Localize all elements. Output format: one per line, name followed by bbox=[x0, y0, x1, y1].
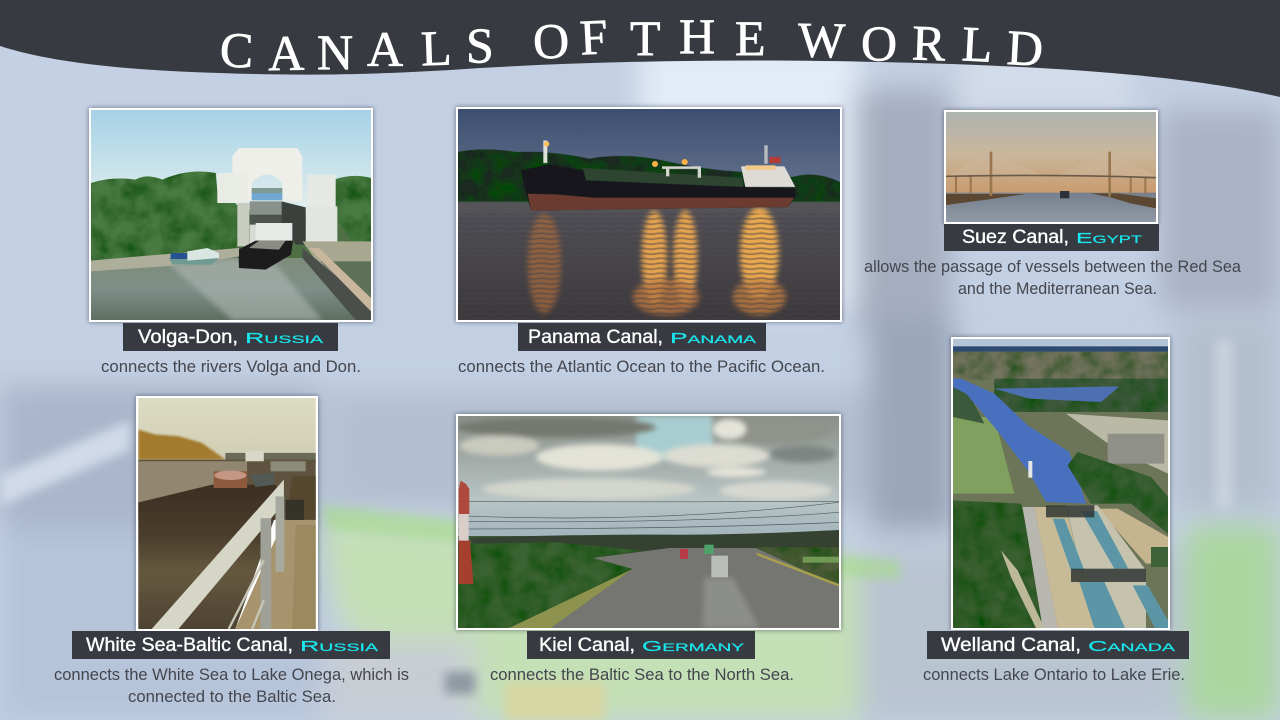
title: S bbox=[466, 17, 494, 73]
label: Kiel Canal: Germany bbox=[642, 638, 745, 655]
title: T bbox=[630, 10, 661, 66]
title: A bbox=[268, 25, 305, 81]
label: White Sea-Baltic Canal bbox=[72, 631, 390, 659]
label: Panama Canal bbox=[518, 323, 766, 351]
title bbox=[219, 8, 1045, 81]
title: E bbox=[735, 10, 766, 66]
label: Suez Canal: Suez Canal, bbox=[962, 227, 1069, 248]
photo: ship on Panama Canal at dusk bbox=[456, 107, 842, 322]
description: Volga-Don: connects the rivers Volga and Don. bbox=[101, 357, 361, 376]
label: Welland Canal bbox=[927, 631, 1189, 659]
label: Volga-Don bbox=[123, 323, 338, 351]
title: O bbox=[532, 12, 570, 70]
title: D bbox=[1006, 19, 1045, 77]
label: Welland Canal: Canada bbox=[1088, 638, 1176, 655]
title: O bbox=[861, 15, 897, 71]
title: L bbox=[961, 15, 994, 73]
label: Panama Canal: Panama bbox=[670, 330, 757, 347]
label: Welland Canal: Welland Canal, bbox=[941, 635, 1081, 656]
label: Suez Canal: Egypt bbox=[1076, 230, 1142, 247]
photo: Welland Canal aerial view bbox=[951, 337, 1170, 630]
description: White Sea-Baltic Canal: connects the White Sea to Lake Onega, which is bbox=[54, 665, 409, 684]
description: Suez Canal bbox=[864, 257, 1242, 298]
description: Kiel Canal: connects the Baltic Sea to the North Sea. bbox=[490, 665, 794, 684]
panel: Welland Canal bbox=[923, 337, 1189, 684]
label: Kiel Canal bbox=[527, 631, 755, 659]
panel: Kiel Canal bbox=[456, 414, 841, 684]
label: Volga-Don: Volga-Don, bbox=[138, 327, 238, 348]
description: Suez Canal: allows the passage of vessels between the Red Sea bbox=[864, 257, 1242, 276]
label: Volga-Don: Russia bbox=[245, 330, 324, 347]
description: Suez Canal: and the Mediterranean Sea. bbox=[958, 279, 1157, 298]
label: Kiel Canal: Kiel Canal, bbox=[539, 635, 635, 656]
title: C bbox=[219, 21, 254, 79]
description: White Sea-Baltic Canal: connected to the Baltic Sea. bbox=[128, 687, 336, 706]
title: N bbox=[317, 24, 353, 80]
label: Panama Canal: Panama Canal, bbox=[528, 327, 663, 348]
title: R bbox=[911, 14, 947, 72]
panel: White Sea-Baltic Canal bbox=[54, 396, 409, 706]
label: Suez Canal bbox=[944, 224, 1159, 251]
panel: Suez Canal bbox=[864, 110, 1242, 298]
photo: White Sea-Baltic Canal sepia bbox=[136, 396, 318, 631]
panel: Panama Canal bbox=[456, 107, 842, 376]
photo: Kiel Canal under clouds bbox=[456, 414, 841, 630]
description: White Sea-Baltic Canal bbox=[54, 665, 409, 706]
panel: Volga-Don bbox=[89, 108, 373, 376]
label: White Sea-Baltic Canal: Russia bbox=[300, 638, 379, 655]
label: White Sea-Baltic Canal: White Sea-Baltic Canal, bbox=[86, 635, 293, 656]
title: L bbox=[420, 19, 452, 76]
title banner bbox=[0, 0, 1280, 97]
title: F bbox=[578, 8, 609, 66]
description: Welland Canal: connects Lake Ontario to Lake Erie. bbox=[923, 665, 1185, 684]
title: H bbox=[679, 8, 715, 64]
title: A bbox=[367, 21, 403, 77]
photo: Volga-Don lock bbox=[89, 108, 373, 322]
photo: Suez Canal bridge bbox=[944, 110, 1158, 224]
title: W bbox=[798, 12, 846, 68]
description: Panama Canal: connects the Atlantic Ocean to the Pacific Ocean. bbox=[458, 357, 825, 376]
